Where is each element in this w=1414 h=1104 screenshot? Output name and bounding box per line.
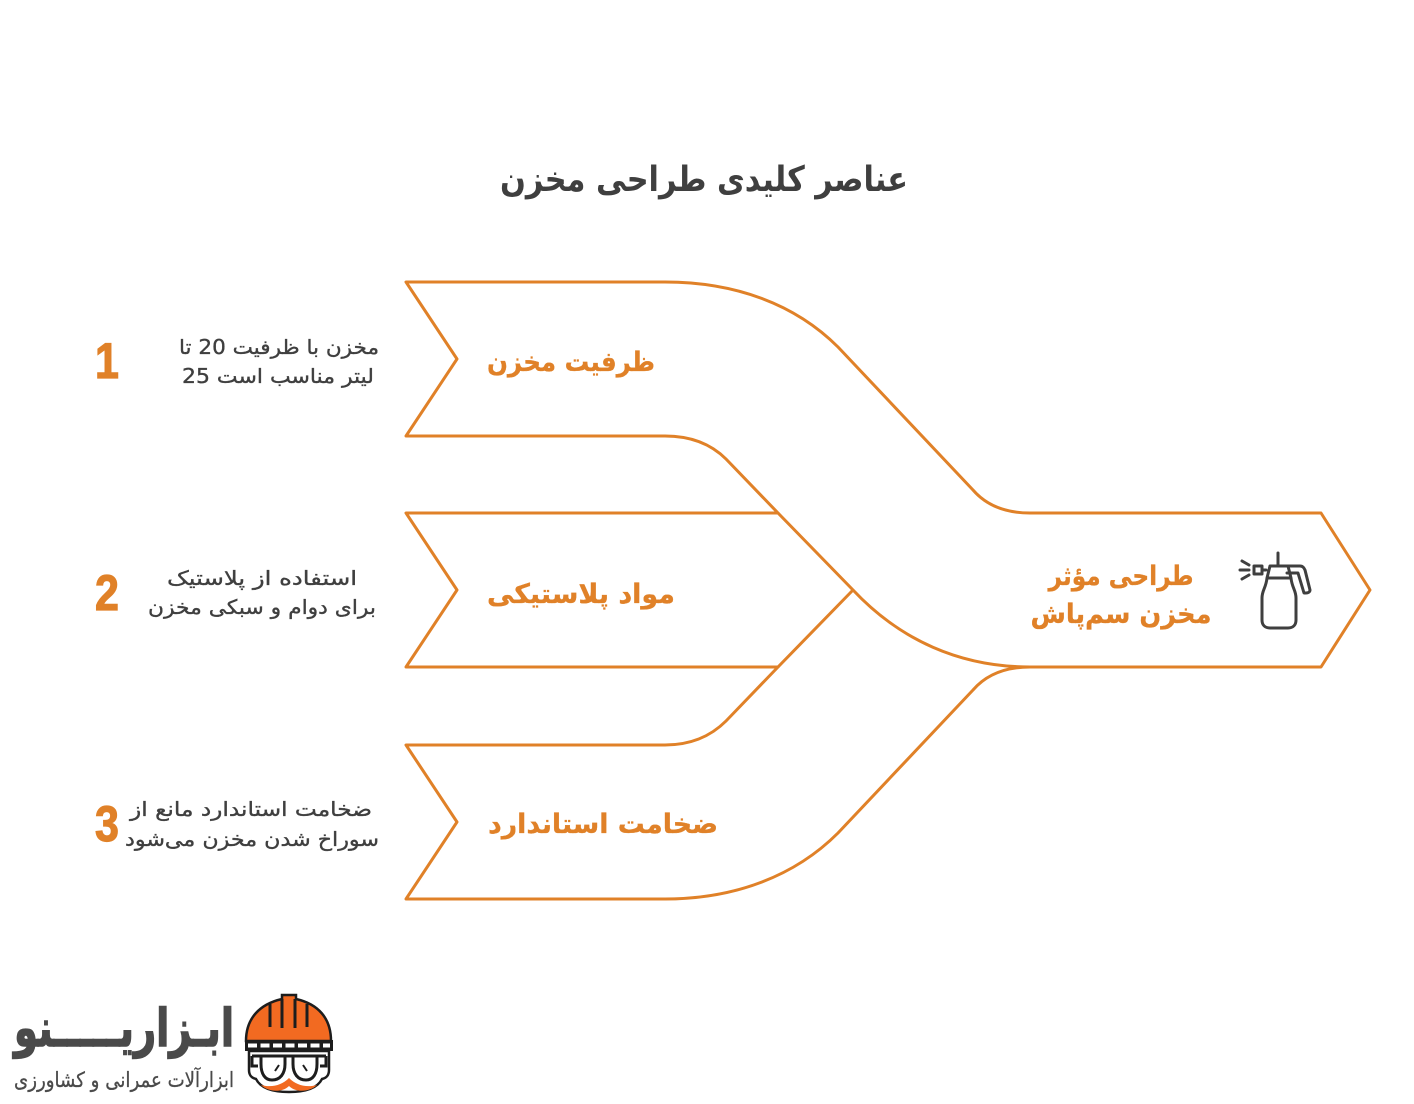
logo tagline: ابزارآلات عمرانی و کشاورزی xyxy=(14,1067,234,1092)
text block 1: لیتر مناسب است 25 xyxy=(182,364,374,388)
funnel diagram xyxy=(406,282,1370,899)
text block 3: سوراخ شدن مخزن می‌شود xyxy=(125,827,379,851)
heading: sprayer tank design: مخزن سم‌پاش xyxy=(1030,599,1212,630)
icon: sprayer xyxy=(1240,553,1310,628)
title: عناصر کلیدی طراحی مخزن xyxy=(500,160,908,200)
text block 3: ضخامت استاندارد مانع از xyxy=(129,797,372,821)
logo wordmark: ابـزاریـــــنو xyxy=(12,999,234,1059)
heading: sprayer tank design xyxy=(1030,561,1212,630)
number 3: 3 xyxy=(95,796,119,852)
heading: sprayer tank design: طراحی مؤثر xyxy=(1047,561,1194,592)
panel: inner divider xyxy=(778,513,1030,667)
text block 2: استفاده از پلاستیک xyxy=(167,566,357,591)
heading: plastic material: مواد پلاستیکی xyxy=(487,579,675,610)
logo mascot xyxy=(245,995,333,1092)
heading: tank capacity: ظرفیت مخزن xyxy=(487,347,655,378)
heading: standard thickness: ضخامت استاندارد xyxy=(488,809,718,840)
text block 2 xyxy=(148,566,376,619)
number 2: 2 xyxy=(95,565,119,621)
text block 1 xyxy=(179,335,379,388)
panel: funnel outline xyxy=(406,282,1370,899)
logo xyxy=(12,995,333,1092)
text block 1: مخزن با ظرفیت 20 تا xyxy=(179,335,379,359)
text block 3 xyxy=(125,797,379,851)
text block 2: برای دوام و سبکی مخزن xyxy=(148,595,376,619)
number 1: 1 xyxy=(95,333,119,389)
